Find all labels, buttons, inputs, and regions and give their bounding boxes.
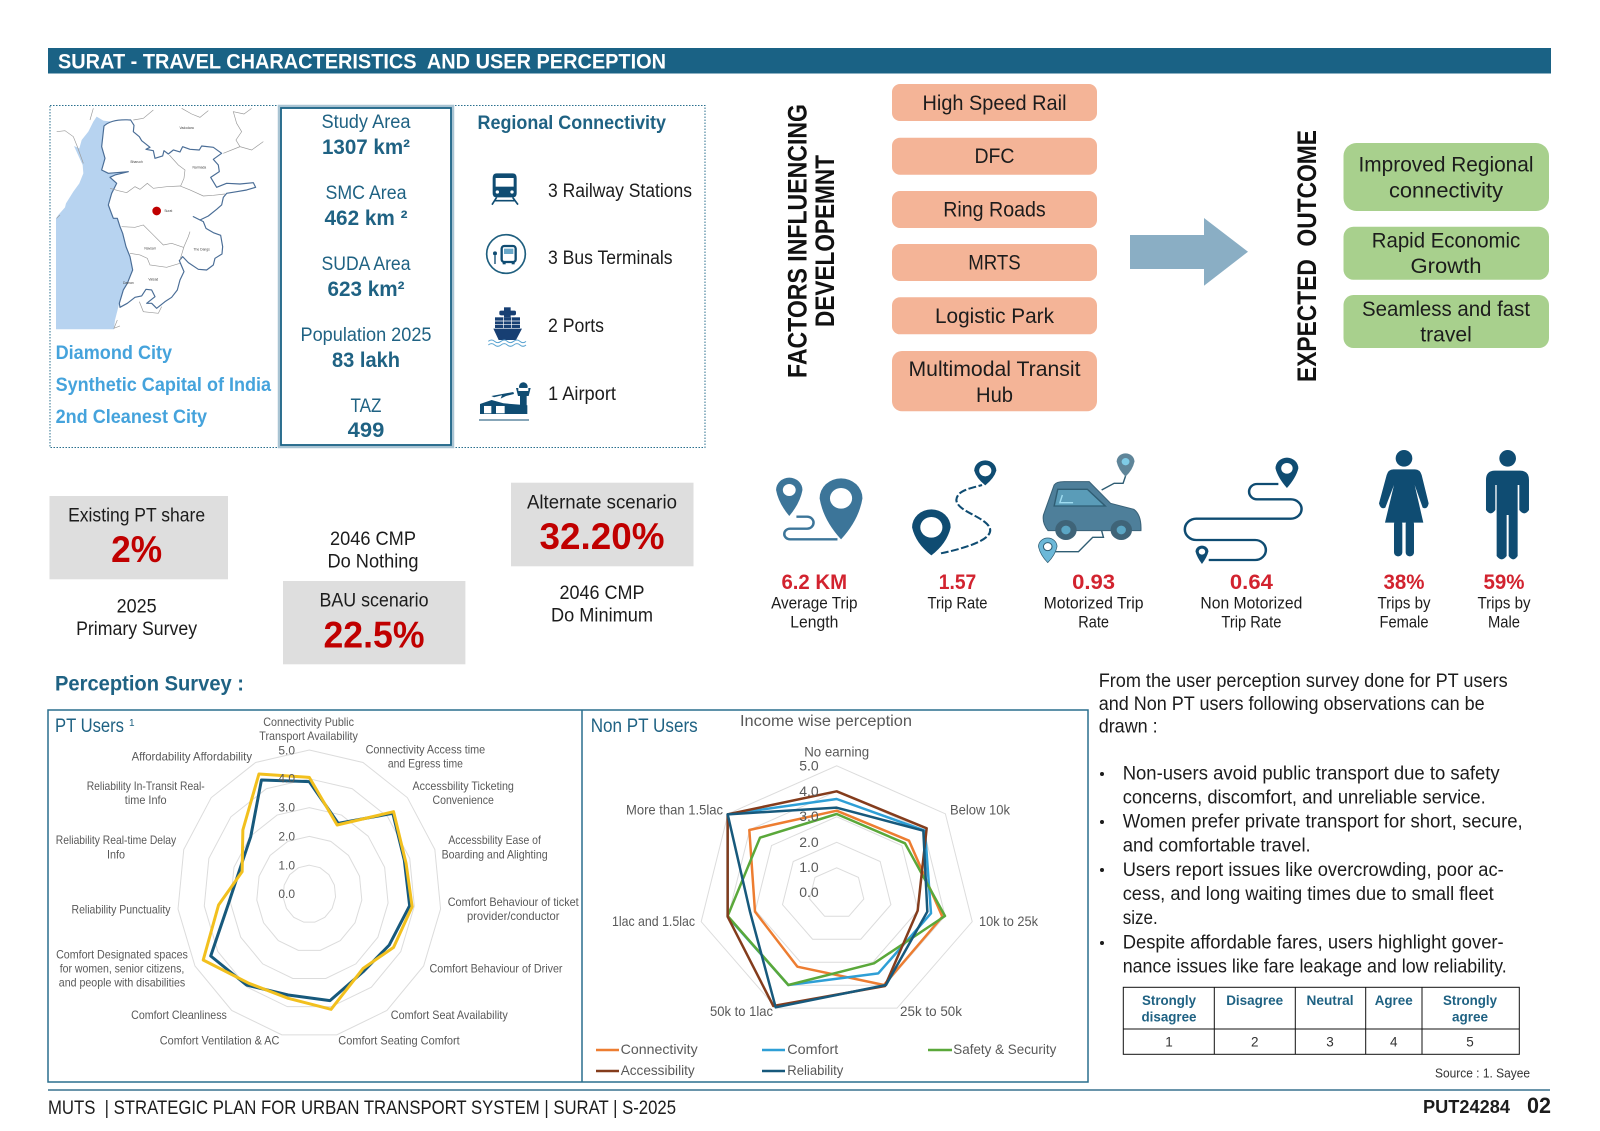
radar axis labels — [612, 744, 1039, 1019]
text block: survey observations: Users report issues like overcrowding, poor ac- — [1123, 860, 1504, 881]
rating scale table: 5 — [1466, 1035, 1474, 1050]
panel: factor boxes: MRTS — [968, 252, 1021, 274]
stat: non motorized trip rate: Trip Rate — [1221, 614, 1281, 632]
key figures box: 623 km² — [328, 278, 405, 301]
panel: non PT users radar: Income wise perception — [740, 713, 912, 730]
radar axis labels: Transport Availability — [259, 729, 358, 743]
stat: existing PT share: Primary Survey — [76, 619, 198, 640]
text block: survey observations: nance issues like fare leakage and low reliability. — [1123, 957, 1507, 978]
radar axis labels: Comfort Designated spaces — [56, 947, 188, 961]
icon: car — [1038, 453, 1141, 563]
key figures box: SMC Area — [326, 183, 407, 204]
stat: existing PT share: 2025 — [117, 597, 157, 618]
text block: survey observations: Women prefer private transport for short, secure, — [1123, 812, 1523, 833]
radar axis labels: Comfort Behaviour of ticket — [448, 895, 579, 909]
map of Surat region: Daman — [123, 281, 134, 285]
radar axis labels: No earning — [804, 744, 869, 760]
icon: bus — [487, 235, 525, 273]
chart legend: Reliability — [787, 1062, 843, 1078]
panel: factor boxes: Multimodal Transit — [908, 358, 1081, 381]
radar scale labels: 0.0 — [278, 887, 295, 901]
key figures box: Population 2025 — [300, 325, 432, 346]
footer: 02 — [1527, 1093, 1551, 1118]
stat: motorized trip rate: Rate — [1078, 614, 1109, 632]
text block: survey observations: and comfortable travel. — [1123, 836, 1311, 857]
radar axis labels: Accessbility Ease of — [448, 833, 541, 847]
text block: survey observations: cess, and long waiting times due to small fleet — [1123, 884, 1494, 905]
stat: motorized trip rate: 0.93 — [1072, 571, 1115, 594]
text: airport: 1 Airport — [548, 384, 617, 405]
key figures box: SUDA Area — [322, 254, 411, 275]
chart legend: Safety & Security — [953, 1041, 1056, 1057]
chart legend: Connectivity — [621, 1041, 698, 1057]
text block: survey observations: size. — [1123, 908, 1158, 929]
text: ports: 2 Ports — [548, 316, 604, 337]
panel: factor boxes: Logistic Park — [935, 305, 1054, 328]
stat: alternate scenario: 32.20% — [540, 516, 664, 557]
factors influencing development heading — [783, 104, 840, 378]
stat: trips by male: Trips by — [1478, 594, 1531, 612]
radar axis labels: and Egress time — [388, 757, 463, 771]
stat: motorized trip rate — [1038, 453, 1144, 632]
panel: outcome boxes: Improved Regional — [1358, 154, 1534, 177]
text block: survey observations: Non-users avoid public transport due to safety — [1123, 763, 1500, 784]
rating scale table: Neutral — [1306, 992, 1354, 1008]
marker: Surat — [152, 207, 161, 215]
radar axis labels: Accessbility Ticketing — [412, 779, 514, 793]
map of Surat region: Navsari — [144, 247, 156, 251]
city descriptors: Diamond City — [56, 343, 173, 364]
radar axis labels: 50k to 1lac — [710, 1003, 773, 1019]
key figures box: TAZ — [350, 396, 382, 417]
text block: survey observations: drawn : — [1099, 717, 1158, 738]
text block: survey observations — [1099, 671, 1523, 978]
radar axis labels — [56, 715, 579, 1047]
map of Surat region: Narmada — [192, 166, 206, 170]
panel: outcome boxes — [1344, 143, 1549, 348]
radar scale labels: 1.0 — [799, 859, 819, 875]
map of Surat region: The Dangs — [194, 248, 210, 252]
panel: PT users radar: PT Users — [55, 716, 124, 737]
panel: non PT users radar — [591, 713, 1056, 1078]
stat: non motorized trip rate: 0.64 — [1230, 571, 1273, 594]
stat: existing PT share: 2% — [111, 529, 162, 570]
stat: existing PT share — [50, 496, 228, 640]
stat: existing PT share: Existing PT share — [68, 506, 205, 527]
city descriptors: Synthetic Capital of India — [56, 375, 271, 396]
panel: factor boxes: High Speed Rail — [922, 92, 1066, 115]
radar axis labels: time Info — [125, 793, 167, 807]
radar grid — [701, 766, 972, 1008]
radar scale labels: 0.0 — [799, 884, 819, 900]
radar scale labels: 2.0 — [799, 834, 819, 850]
radar scale labels: 2.0 — [278, 830, 295, 844]
city descriptors: 2nd Cleanest City — [56, 407, 208, 428]
rating scale table: agree — [1452, 1009, 1488, 1025]
stat: BAU scenario: 2046 CMP — [330, 529, 416, 550]
map of Surat region — [56, 108, 263, 329]
radar axis labels: Affordability Affordability — [132, 750, 252, 764]
text block: survey observations: concerns, discomfort, and unreliable service. — [1123, 787, 1486, 808]
radar axis labels: provider/conductor — [467, 909, 559, 923]
rating scale table: disagree — [1142, 1009, 1197, 1025]
icon: airport — [479, 382, 531, 420]
stat: BAU scenario: 22.5% — [324, 614, 424, 655]
chart legend: Accessibility — [621, 1062, 695, 1078]
text block: survey observations: and Non PT users following observations can be — [1099, 694, 1485, 715]
text: bus terminals: 3 Bus Terminals — [548, 248, 673, 269]
stat: trips by female: Female — [1380, 614, 1428, 632]
panel: PT users radar — [55, 715, 579, 1047]
panel: PT users radar: 1 — [129, 718, 135, 729]
rating scale table: Agree — [1375, 992, 1413, 1008]
rating scale table: Strongly — [1142, 992, 1196, 1008]
icon: ship — [488, 307, 526, 346]
stat: average trip length: Length — [790, 614, 838, 632]
stat: non motorized trip rate: Non Motorized — [1200, 594, 1302, 612]
factors influencing development heading: DEVELOPEMNT — [810, 155, 840, 327]
stat: average trip length: Average Trip — [771, 594, 858, 612]
radar scale labels — [278, 743, 295, 901]
radar scale labels: 1.0 — [278, 858, 295, 872]
stat: alternate scenario: 2046 CMP — [560, 583, 644, 604]
radar axis labels: Info — [107, 847, 125, 861]
key figures box: 499 — [348, 419, 384, 442]
rating scale table: 3 — [1326, 1035, 1334, 1050]
radar series: PT users — [203, 774, 412, 1009]
panel: outcome boxes: Seamless and fast — [1362, 298, 1530, 321]
panel: outcome boxes: connectivity — [1389, 180, 1504, 203]
icon: trip rate route — [912, 460, 996, 555]
radar axis labels: Comfort Seating Comfort — [338, 1033, 460, 1047]
icon: trip length pins — [776, 478, 862, 539]
key figures box — [279, 106, 453, 447]
radar axis labels: 1lac and 1.5lac — [612, 913, 695, 929]
stat: average trip length — [771, 478, 862, 632]
stat: trips by male: 59% — [1484, 571, 1525, 594]
text block: survey observations: Despite affordable fares, users highlight gover- — [1123, 933, 1504, 954]
radar axis labels: 25k to 50k — [900, 1003, 963, 1019]
stat: trips by male — [1478, 450, 1531, 632]
map of Surat region: Vadodara — [180, 126, 194, 130]
stat: motorized trip rate: Motorized Trip — [1044, 594, 1144, 612]
text block: survey observations: From the user perception survey done for PT users — [1099, 671, 1508, 692]
stat: alternate scenario: Alternate scenario — [527, 493, 677, 514]
radar scale labels: 3.0 — [799, 808, 819, 824]
rating scale table — [1123, 987, 1519, 1054]
radar axis labels: Reliability In-Transit Real- — [87, 779, 205, 793]
icon: winding road — [1185, 458, 1302, 564]
radar axis labels: Comfort Seat Availability — [391, 1008, 508, 1022]
chart legend: Comfort — [787, 1041, 838, 1057]
expected outcome heading: EXPECTED OUTCOME — [1292, 130, 1322, 382]
panel: outcome boxes: Growth — [1410, 255, 1482, 278]
panel: non PT users radar: Non PT Users — [591, 716, 698, 737]
footer: MUTS | STRATEGIC PLAN FOR URBAN TRANSPORT SYSTEM | SURAT | S-2025 — [48, 1098, 676, 1119]
map of Surat region: Bharuch — [130, 160, 143, 164]
radar axis labels: for women, senior citizens, — [60, 962, 184, 976]
key figures box: Study Area — [322, 112, 411, 133]
radar scale labels: 4.0 — [278, 772, 295, 786]
radar grid — [178, 750, 441, 1035]
stat: trips by female: 38% — [1384, 571, 1425, 594]
source note: Source : 1. Sayee — [1435, 1065, 1530, 1080]
stat: BAU scenario: Do Nothing — [328, 552, 418, 573]
stat: trips by female: Trips by — [1378, 594, 1431, 612]
map of Surat region: Surat — [164, 209, 172, 213]
stat: trip rate: 1.57 — [939, 571, 976, 594]
panel: study area overview — [50, 106, 705, 448]
panel: perception charts frame — [48, 710, 1088, 1082]
stat: trips by female — [1378, 450, 1431, 632]
panel: outcome boxes: Rapid Economic — [1372, 230, 1520, 253]
chart legend — [596, 1041, 1056, 1078]
icon: train — [492, 173, 518, 205]
city descriptors — [56, 343, 271, 428]
title banner: SURAT - TRAVEL CHARACTERISTICS AND USER PERCEPTION — [58, 50, 666, 74]
icon: female figure — [1379, 450, 1429, 556]
key figures box: 462 km ² — [324, 207, 408, 230]
rating scale table: 1 — [1165, 1035, 1173, 1050]
map of Surat region: Valsad — [148, 277, 158, 281]
radar axis labels: Comfort Behaviour of Driver — [430, 961, 563, 975]
text: railway stations: 3 Railway Stations — [548, 181, 692, 202]
radar scale labels: 4.0 — [799, 783, 819, 799]
radar axis labels: Connectivity Public — [263, 715, 354, 729]
panel: factor boxes: Hub — [976, 384, 1013, 407]
radar axis labels: and people with disabilities — [59, 976, 185, 990]
footer — [48, 1090, 1551, 1119]
radar series: income groups — [728, 791, 945, 1007]
radar axis labels: Comfort Ventilation & AC — [160, 1033, 280, 1047]
radar scale labels: 3.0 — [278, 801, 295, 815]
stat: trips by male: Male — [1488, 614, 1520, 632]
perception survey heading: Perception Survey : — [55, 673, 244, 696]
radar axis labels: More than 1.5lac — [626, 801, 723, 817]
panel: factor boxes: Ring Roads — [943, 199, 1046, 222]
radar axis labels: Reliability Real-time Delay — [56, 833, 176, 847]
stat: BAU scenario — [283, 529, 465, 664]
radar axis labels: Connectivity Access time — [366, 742, 485, 756]
panel: factor boxes — [892, 84, 1097, 411]
title banner — [48, 48, 1551, 74]
stat: alternate scenario — [511, 483, 694, 627]
radar axis labels: Below 10k — [950, 801, 1011, 817]
radar scale labels: 5.0 — [278, 743, 295, 757]
stat: trip rate — [912, 460, 996, 612]
stat: trip rate: Trip Rate — [928, 594, 988, 612]
rating scale table: Strongly — [1443, 992, 1497, 1008]
radar scale labels — [799, 758, 819, 900]
key figures box: 83 lakh — [332, 349, 400, 372]
radar axis labels: Boarding and Alighting — [442, 847, 548, 861]
radar axis labels: 10k to 25k — [979, 913, 1039, 929]
rating scale table: 4 — [1390, 1035, 1398, 1050]
stat: BAU scenario: BAU scenario — [320, 591, 428, 612]
rating scale table: Disagree — [1226, 992, 1283, 1008]
radar axis labels: Reliability Punctuality — [72, 902, 170, 916]
stat: non motorized trip rate — [1185, 458, 1302, 632]
rating scale table: 2 — [1251, 1035, 1258, 1050]
panel: factor boxes: DFC — [974, 145, 1014, 168]
footer: PUT24284 — [1423, 1096, 1511, 1117]
stat: alternate scenario: Do Minimum — [551, 606, 653, 627]
icon: male figure — [1486, 450, 1529, 559]
factors influencing development heading: FACTORS INFLUENCING — [783, 104, 813, 378]
arrow — [1130, 218, 1248, 286]
stat: average trip length: 6.2 KM — [781, 571, 847, 594]
regional connectivity heading: Regional Connectivity — [478, 113, 666, 134]
key figures box: 1307 km² — [322, 136, 410, 159]
radar scale labels: 5.0 — [799, 758, 819, 774]
radar axis labels: Convenience — [432, 793, 494, 807]
radar axis labels: Comfort Cleanliness — [131, 1008, 227, 1022]
panel: outcome boxes: travel — [1420, 324, 1472, 347]
